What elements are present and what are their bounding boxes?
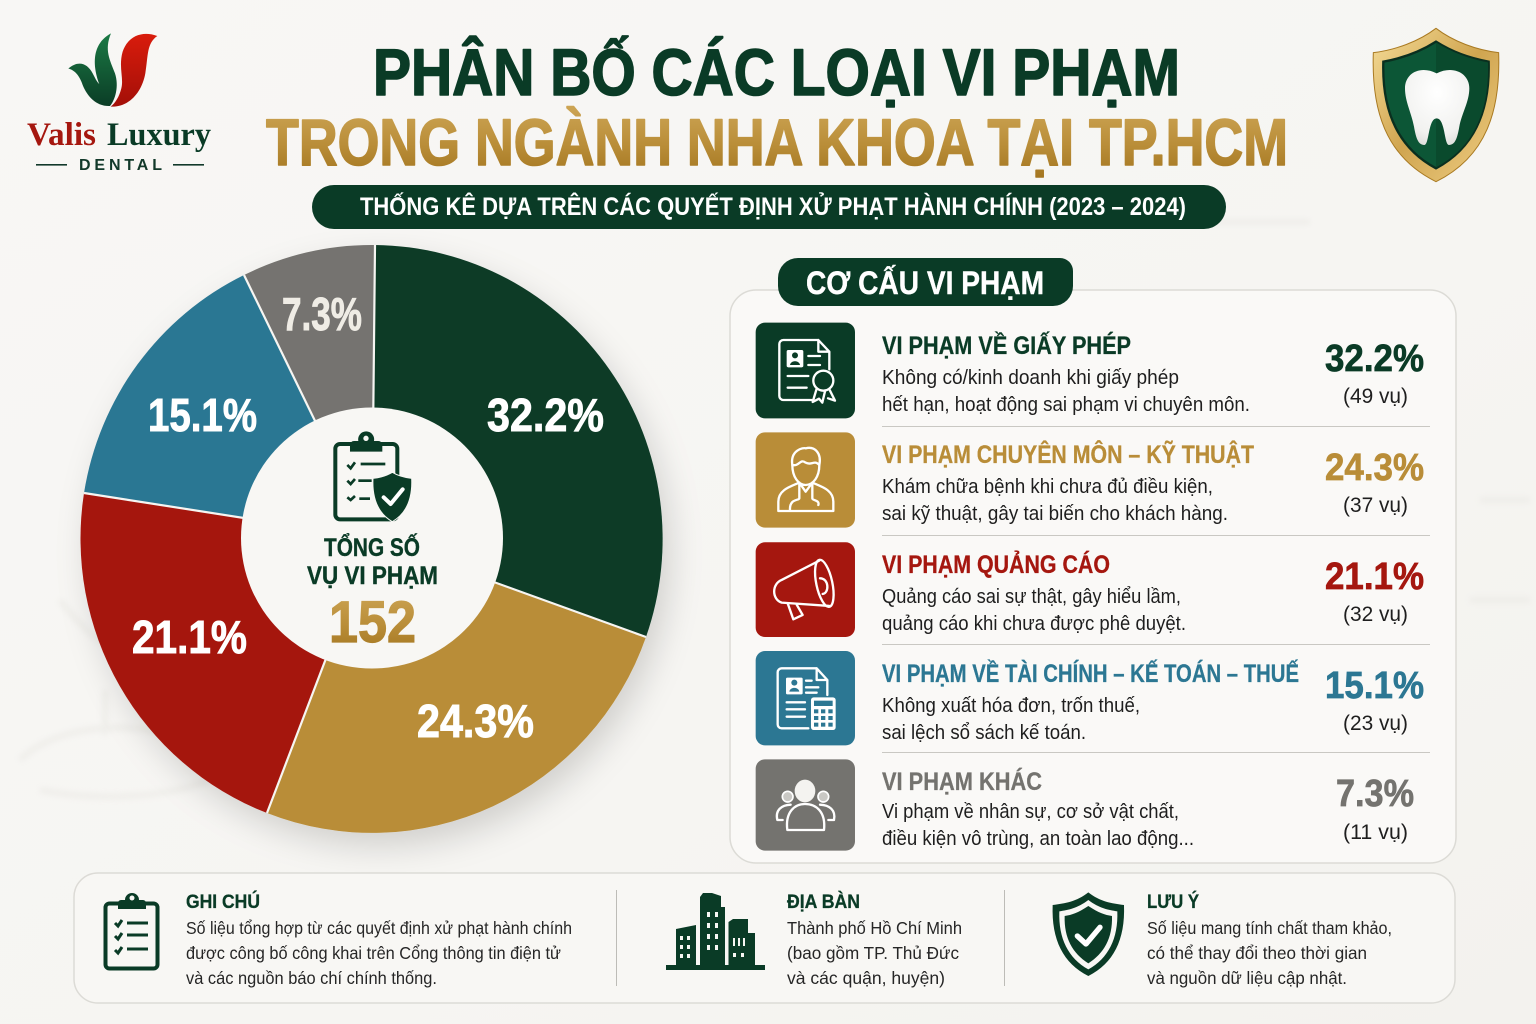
logo wordmark: DENTAL <box>79 157 162 174</box>
other value: (11 vụ) <box>1343 821 1408 844</box>
icon: doctor <box>756 432 855 528</box>
logo mark: leaves <box>68 33 157 107</box>
centre total text: 152 <box>329 590 416 655</box>
note: lưu ý <box>1053 891 1392 988</box>
professional value <box>1325 447 1424 517</box>
licence value: (49 vụ) <box>1343 385 1408 408</box>
centre total text <box>307 532 438 655</box>
professional text: VI PHẠM CHUYÊN MÔN – KỸ THUẬT <box>882 439 1254 469</box>
advertising value <box>1325 556 1424 626</box>
centre total text: TỔNG SỐ <box>324 532 420 562</box>
finance text: VI PHẠM VỀ TÀI CHÍNH – KẾ TOÁN – THUẾ <box>882 659 1299 688</box>
logo wordmark: Valis <box>27 117 96 153</box>
advertising text: VI PHẠM QUẢNG CÁO <box>882 549 1110 579</box>
pie percentage labels <box>132 288 604 747</box>
licence value: 32.2% <box>1325 338 1424 380</box>
advertising text: Quảng cáo sai sự thật, gây hiểu lầm, <box>882 586 1181 608</box>
địa bàn text: ĐỊA BÀN <box>787 891 860 913</box>
icon: clipboard with shield <box>335 431 412 522</box>
advertising value: (32 vụ) <box>1343 603 1408 626</box>
row: professional violations <box>756 432 1424 528</box>
địa bàn text: (bao gồm TP. Thủ Đức <box>787 943 959 963</box>
icon: licence document <box>756 323 855 418</box>
icon: gold shield with tooth <box>1373 28 1499 182</box>
địa bàn text: Thành phố Hồ Chí Minh <box>787 918 962 938</box>
row: other violations <box>756 759 1414 851</box>
panel: footer notes <box>74 873 1455 1003</box>
pie slices <box>81 245 663 833</box>
note: địa bàn <box>666 891 962 988</box>
licence text: Không có/kinh doanh khi giấy phép <box>882 367 1179 389</box>
lưu ý text: và nguồn dữ liệu cập nhật. <box>1147 968 1347 988</box>
finance value <box>1325 665 1424 735</box>
ghi chú text: và các nguồn báo chí chính thống. <box>186 968 437 988</box>
professional value: (37 vụ) <box>1343 494 1408 517</box>
licence value <box>1325 338 1424 408</box>
pie percentage labels: 24.3% <box>417 695 534 747</box>
other text <box>882 767 1194 850</box>
other text: Vi phạm về nhân sự, cơ sở vật chất, <box>882 801 1179 823</box>
finance text <box>882 659 1299 744</box>
địa bàn text <box>787 891 962 988</box>
other value: 7.3% <box>1336 773 1414 815</box>
panel: violation structure <box>730 258 1456 863</box>
ghi chú text: GHI CHÚ <box>186 891 260 913</box>
chart: donut pie of violations <box>81 245 663 833</box>
pie percentage labels: 21.1% <box>132 611 247 663</box>
pie percentage labels: 7.3% <box>282 288 362 340</box>
địa bàn text: và các quận, huyện) <box>787 968 945 988</box>
ghi chú text <box>186 891 572 988</box>
logo wordmark: Luxury <box>107 117 211 153</box>
icon: clipboard <box>106 893 158 968</box>
ghi chú text: Số liệu tổng hợp từ các quyết định xử phạt hành chính <box>186 918 572 938</box>
professional text: sai kỹ thuật, gây tai biến cho khách hàng. <box>882 503 1228 525</box>
icon: people <box>756 759 855 851</box>
advertising text <box>882 549 1186 635</box>
subtitle pill: THỐNG KÊ DỰA TRÊN CÁC QUYẾT ĐỊNH XỬ PHẠT HÀNH CHÍNH (2023 – 2024) <box>360 191 1186 221</box>
donut centre <box>241 408 503 668</box>
licence text <box>882 331 1250 416</box>
logo wordmark <box>27 117 211 174</box>
title: TRONG NGÀNH NHA KHOA TẠI TP.HCM <box>266 105 1288 179</box>
finance text: Không xuất hóa đơn, trốn thuế, <box>882 695 1140 717</box>
licence text: VI PHẠM VỀ GIẤY PHÉP <box>882 331 1131 360</box>
lưu ý text: Số liệu mang tính chất tham khảo, <box>1147 918 1392 938</box>
lưu ý text: có thể thay đổi theo thời gian <box>1147 943 1367 963</box>
lưu ý text: LƯU Ý <box>1147 891 1199 913</box>
title <box>266 35 1288 179</box>
pie percentage labels: 32.2% <box>487 389 604 441</box>
icon: city buildings <box>666 893 765 970</box>
finance value: (23 vụ) <box>1343 712 1408 735</box>
logo: Valis Luxury Dental <box>27 33 211 174</box>
panel heading pill: CƠ CẤU VI PHẠM <box>806 265 1044 301</box>
row: licence violations <box>756 323 1424 418</box>
pie percentage labels: 15.1% <box>148 389 257 441</box>
other text: điều kiện vô trùng, an toàn lao động... <box>882 828 1194 850</box>
finance value: 15.1% <box>1325 665 1424 707</box>
icon: shield check <box>1053 892 1124 976</box>
icon: megaphone <box>756 542 855 637</box>
professional text: Khám chữa bệnh khi chưa đủ điều kiện, <box>882 476 1213 498</box>
finance text: sai lệch sổ sách kế toán. <box>882 722 1086 744</box>
panel heading pill <box>778 258 1073 306</box>
licence text: hết hạn, hoạt động sai phạm vi chuyên môn. <box>882 394 1250 416</box>
subtitle pill <box>312 185 1226 229</box>
other text: VI PHẠM KHÁC <box>882 767 1042 796</box>
row: finance violations <box>756 651 1424 745</box>
title: PHÂN BỐ CÁC LOẠI VI PHẠM <box>373 35 1180 109</box>
icon: document and calculator <box>756 651 855 745</box>
other value <box>1336 773 1414 844</box>
note: ghi chú <box>106 891 572 988</box>
professional value: 24.3% <box>1325 447 1424 489</box>
lưu ý text <box>1147 891 1392 988</box>
centre total text: VỤ VI PHẠM <box>307 562 438 590</box>
advertising value: 21.1% <box>1325 556 1424 598</box>
ghi chú text: được công bố công khai trên Cổng thông tin điện tử <box>186 943 561 963</box>
advertising text: quảng cáo khi chưa được phê duyệt. <box>882 613 1186 635</box>
professional text <box>882 439 1254 525</box>
row: advertising violations <box>756 542 1424 637</box>
